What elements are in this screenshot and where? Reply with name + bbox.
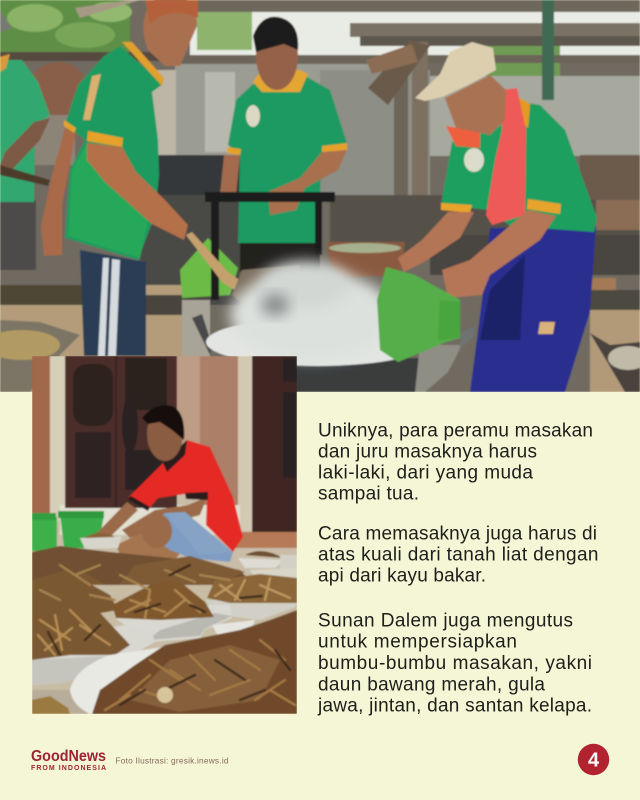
paragraph 3: daun bawang merah, gula (318, 674, 545, 696)
paragraph 3: jawa, jintan, dan santan kelapa. (317, 696, 592, 716)
paragraph 3: bumbu-bumbu masakan, yakni (318, 653, 592, 674)
cap (415, 42, 496, 101)
track pants (80, 250, 146, 356)
back row of food (32, 546, 258, 610)
logo: GoodNews from Indonesia: GoodNews (31, 748, 106, 765)
pot bottom right (590, 333, 640, 392)
inset photo: man arranging plates of food (32, 356, 297, 714)
concrete wall left (174, 63, 370, 156)
table base (32, 585, 297, 714)
paragraph 3: untuk mempersiapkan (318, 632, 517, 652)
carved door (65, 356, 177, 508)
photo: men cooking over a large wok (0, 0, 640, 392)
middle-right food and plate (205, 574, 297, 620)
food bottom-left corner (32, 696, 70, 714)
worker on left edge (0, 10, 50, 270)
logo: GoodNews from Indonesia: FROM INDONESIA (31, 765, 106, 772)
wall columns (32, 356, 252, 535)
concrete wall right (400, 76, 640, 156)
red shirt (127, 440, 243, 552)
fried food strands (38, 565, 295, 710)
metal stand (205, 192, 335, 300)
knee (142, 514, 172, 548)
worker 2 (220, 17, 347, 272)
wooden paddle (186, 231, 239, 290)
right arm (87, 143, 188, 240)
badge (246, 105, 260, 127)
body text (317, 420, 598, 716)
paragraph 2 (318, 524, 598, 586)
left arm (41, 128, 76, 256)
shirt badge (83, 74, 101, 120)
wooden posts (412, 42, 428, 200)
foliage background (0, 0, 561, 76)
paragraph 2: atas kuali dari tanah liat dengan (318, 544, 598, 566)
paragraph 2: api dari kayu bakar. (318, 566, 486, 586)
face (445, 75, 506, 135)
pants (470, 226, 596, 392)
paragraph 2: Cara memasaknya juga harus di (318, 524, 597, 544)
red scarf (486, 88, 526, 225)
logo: GoodNews from Indonesia (31, 748, 106, 772)
brown pot upper left (32, 62, 85, 116)
plate held by man (80, 536, 122, 549)
worker 1 with paddle (41, 0, 198, 356)
brick stove left (0, 285, 190, 392)
center plate with food (112, 580, 232, 642)
big wok with steam (192, 261, 476, 392)
paragraph 1: dan juru masaknya harus (318, 442, 537, 462)
front left food and plate (32, 600, 155, 685)
small plates at right (238, 551, 297, 588)
bucket (377, 267, 460, 362)
paragraph 1: sampai tua. (318, 484, 419, 504)
food mound rear left (32, 570, 118, 618)
arms (398, 212, 474, 272)
photo credit: Foto Ilustrasi: gresik.inews.id (116, 756, 229, 766)
big front food mound (92, 610, 297, 714)
brick stove right (590, 305, 640, 392)
green bucket behind paddle (180, 238, 238, 298)
shirt (441, 100, 597, 232)
page number badge: 4 (588, 750, 600, 772)
arms (220, 155, 240, 195)
paragraph 3: Sunan Dalem juga mengutus (318, 610, 573, 632)
denim shorts (143, 513, 233, 562)
small bowl between (212, 620, 255, 636)
pot bottom left (0, 320, 80, 392)
head (255, 42, 299, 91)
paragraph 1: Uniknya, para peramu masakan (318, 420, 593, 442)
man in red shirt (92, 405, 243, 562)
shirt (65, 46, 163, 260)
dark pots and cookware center (156, 154, 242, 196)
page number badge (578, 744, 609, 775)
second door (252, 356, 297, 534)
paragraph 1: laki-laki, dari yang muda (318, 462, 533, 484)
clay cooking pan (328, 242, 405, 278)
worker 3 with cap and green bucket (377, 42, 597, 392)
head (143, 0, 197, 66)
arms (92, 502, 138, 545)
stacked wood right (580, 155, 640, 200)
legs (116, 515, 190, 560)
head (147, 407, 183, 461)
green buckets (32, 511, 104, 551)
paragraph 1 (318, 420, 593, 504)
paragraph 3 (317, 610, 592, 716)
front plate (70, 646, 170, 714)
